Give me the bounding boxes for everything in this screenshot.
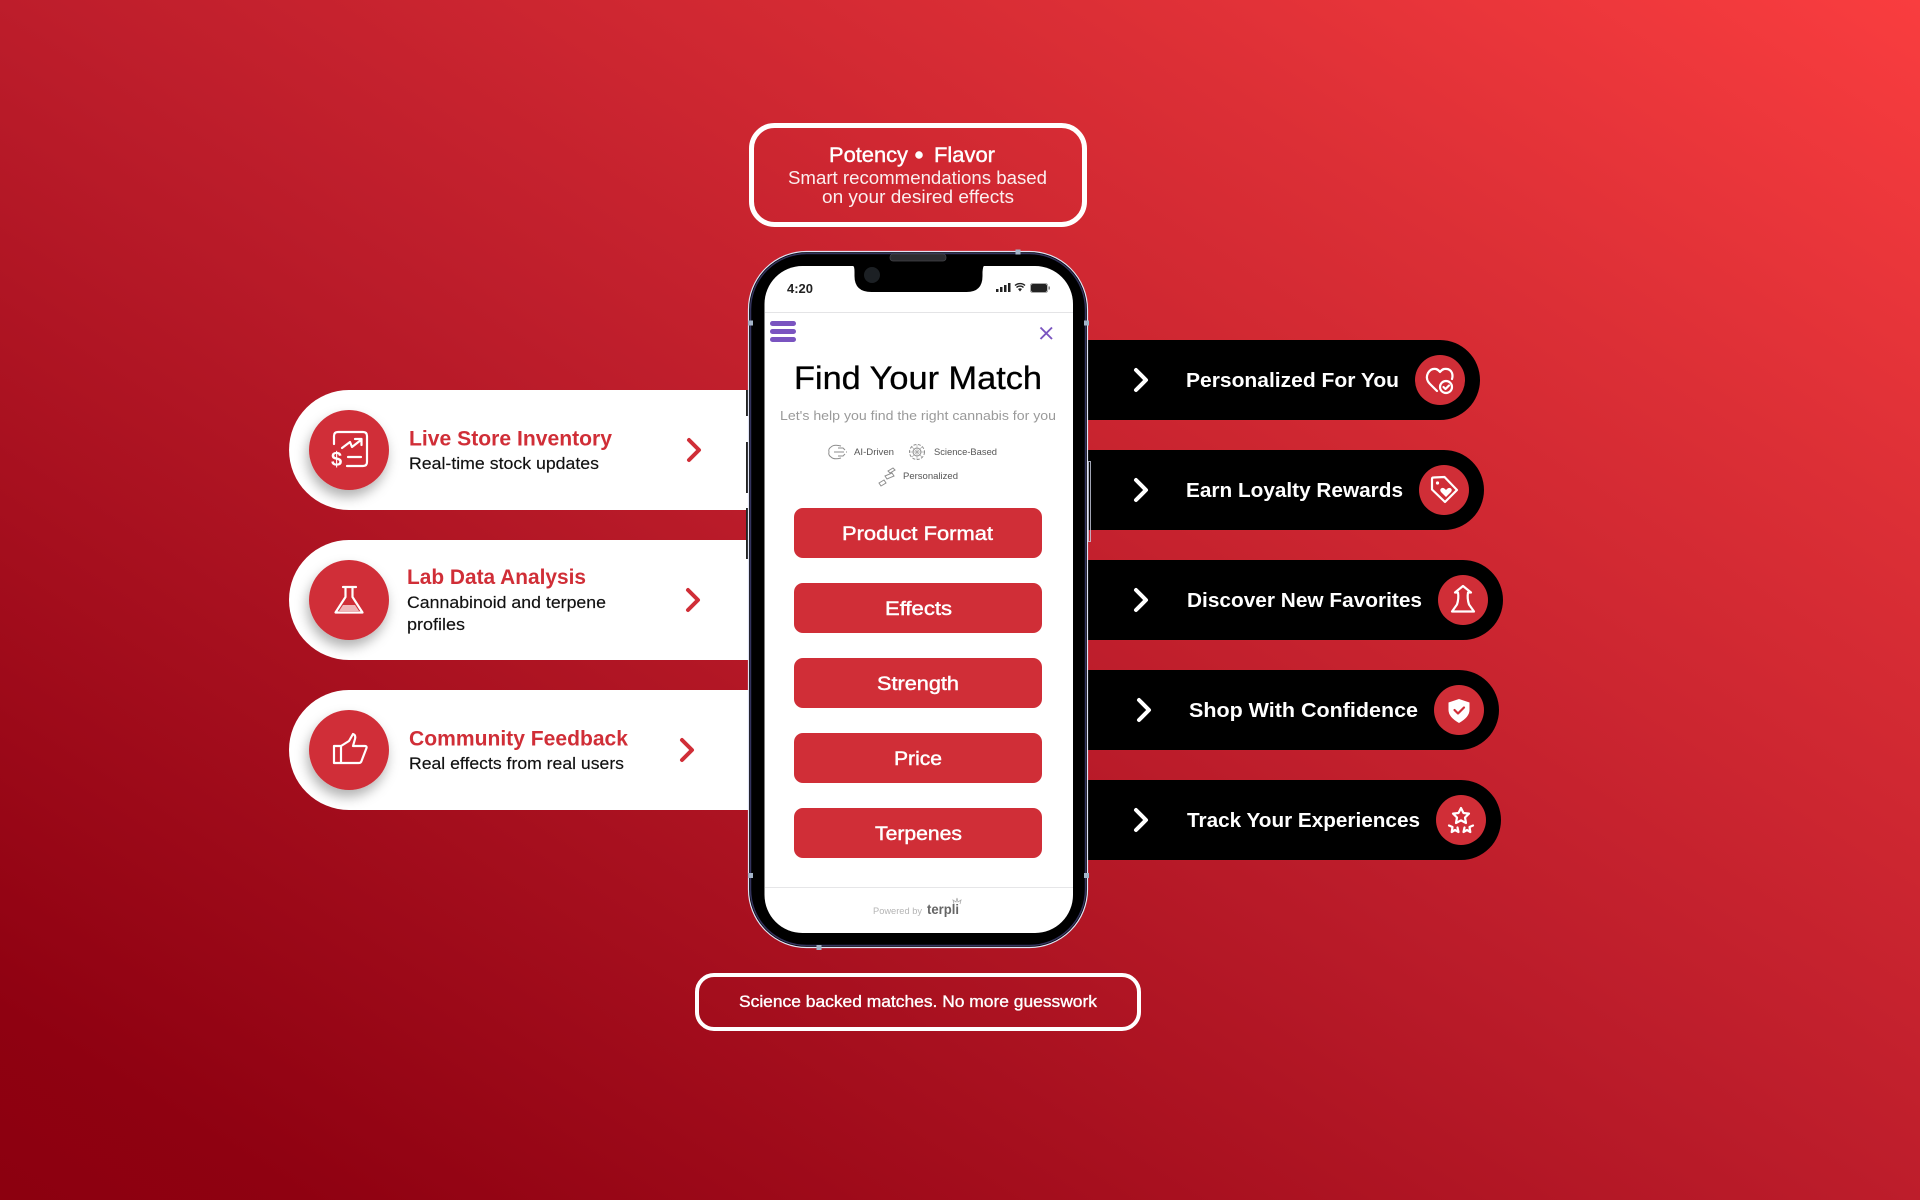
phone body bbox=[748, 252, 1088, 948]
header divider bbox=[765, 312, 1073, 313]
feature: personalized: Personalized bbox=[903, 471, 958, 482]
panel: lab data analysis bbox=[289, 540, 760, 660]
heading: earn loyalty rewards: Earn Loyalty Rewards bbox=[1186, 480, 1403, 502]
handles bbox=[748, 250, 1089, 950]
callout heading: Potency bbox=[829, 144, 909, 167]
notch bbox=[850, 262, 987, 292]
heading: discover new favorites: Discover New Favorites bbox=[1187, 590, 1422, 612]
callout: science backed matches bbox=[697, 975, 1139, 1029]
arrow bbox=[1139, 700, 1149, 720]
panel: discover new favorites bbox=[1075, 560, 1503, 640]
arrow bbox=[688, 590, 698, 610]
text: cannabinoid and terpene profiles bbox=[407, 594, 606, 634]
callout heading: Flavor bbox=[934, 144, 995, 167]
status time: 4:20 bbox=[787, 281, 813, 296]
icon: flask bbox=[309, 560, 389, 640]
footer: powered by terpli: Powered by bbox=[873, 906, 922, 917]
panel: live store inventory bbox=[289, 390, 760, 510]
icon: chess piece bbox=[1438, 575, 1488, 625]
feature: science-based bbox=[910, 444, 997, 460]
button: effects bbox=[794, 583, 1042, 633]
icon: thumbs up bbox=[309, 710, 389, 790]
button: terpenes bbox=[794, 808, 1042, 858]
feature: AI-driven bbox=[829, 445, 894, 459]
feature: personalized bbox=[879, 468, 958, 486]
feature: science-based: Science-Based bbox=[934, 447, 997, 458]
text: real effects from real users: Real effects from real users bbox=[409, 755, 624, 773]
button: price: Price bbox=[894, 748, 942, 770]
heading: track your experiences: Track Your Experiences bbox=[1187, 810, 1420, 832]
phone bbox=[746, 250, 1090, 950]
callout: science backed matches: Science backed matches. No more guesswork bbox=[739, 993, 1098, 1011]
heading: live store inventory: Live Store Inventory bbox=[409, 428, 612, 450]
panel: community feedback bbox=[289, 690, 760, 810]
heading: shop with confidence: Shop With Confidence bbox=[1189, 700, 1418, 722]
arrow bbox=[1136, 590, 1146, 610]
icon: hamburger menu bbox=[770, 321, 796, 342]
camera bbox=[864, 267, 880, 283]
footer: powered by terpli bbox=[873, 898, 961, 917]
button: effects: Effects bbox=[885, 598, 952, 620]
button: product format: Product Format bbox=[842, 523, 994, 545]
icon: price tag heart bbox=[1419, 465, 1469, 515]
panel: shop with confidence bbox=[1075, 670, 1499, 750]
callout description bbox=[788, 168, 1047, 207]
arrow bbox=[1136, 480, 1146, 500]
callout description: on your desired effects bbox=[822, 187, 1014, 207]
screen bbox=[764, 266, 1073, 933]
heading: community feedback: Community Feedback bbox=[409, 728, 628, 750]
title: find your match: Find Your Match bbox=[794, 360, 1042, 396]
arrow bbox=[682, 740, 692, 760]
icon: inventory chart: $ bbox=[331, 449, 342, 471]
panel: earn loyalty rewards bbox=[1075, 450, 1484, 530]
text: real-time stock updates: Real-time stock updates bbox=[409, 455, 599, 473]
callout heading bbox=[829, 144, 995, 167]
heading: personalized for you: Personalized For You bbox=[1186, 370, 1399, 392]
button: product format bbox=[794, 508, 1042, 558]
subtitle: Let's help you find the right cannabis for you bbox=[780, 408, 1056, 423]
button: strength bbox=[794, 658, 1042, 708]
status icons bbox=[996, 283, 1050, 293]
feature: AI-driven: AI-Driven bbox=[854, 447, 894, 458]
button: terpenes: Terpenes bbox=[875, 823, 962, 845]
text: cannabinoid and terpene profiles: Cannabinoid and terpene bbox=[407, 594, 606, 612]
footer divider bbox=[765, 887, 1073, 888]
text: cannabinoid and terpene profiles: profiles bbox=[407, 616, 465, 634]
icon: close bbox=[1040, 328, 1052, 339]
callout: potency and flavor bbox=[752, 126, 1084, 224]
panel: personalized for you bbox=[1075, 340, 1480, 420]
arrow bbox=[1136, 810, 1146, 830]
arrow bbox=[689, 440, 699, 460]
side buttons bbox=[746, 390, 1090, 559]
phone inner edge bbox=[750, 254, 1086, 946]
button: price bbox=[794, 733, 1042, 783]
speaker bbox=[890, 254, 946, 261]
icon: shield check bbox=[1434, 685, 1484, 735]
panel: track your experiences bbox=[1075, 780, 1501, 860]
icon: three stars bbox=[1436, 795, 1486, 845]
footer: powered by terpli: terpli bbox=[927, 901, 959, 917]
arrow bbox=[1136, 370, 1146, 390]
heading: lab data analysis: Lab Data Analysis bbox=[407, 566, 586, 589]
icon: heart check bbox=[1415, 355, 1465, 405]
button: strength: Strength bbox=[877, 673, 959, 695]
icon: inventory chart bbox=[309, 410, 389, 490]
callout description: Smart recommendations based bbox=[788, 168, 1047, 188]
